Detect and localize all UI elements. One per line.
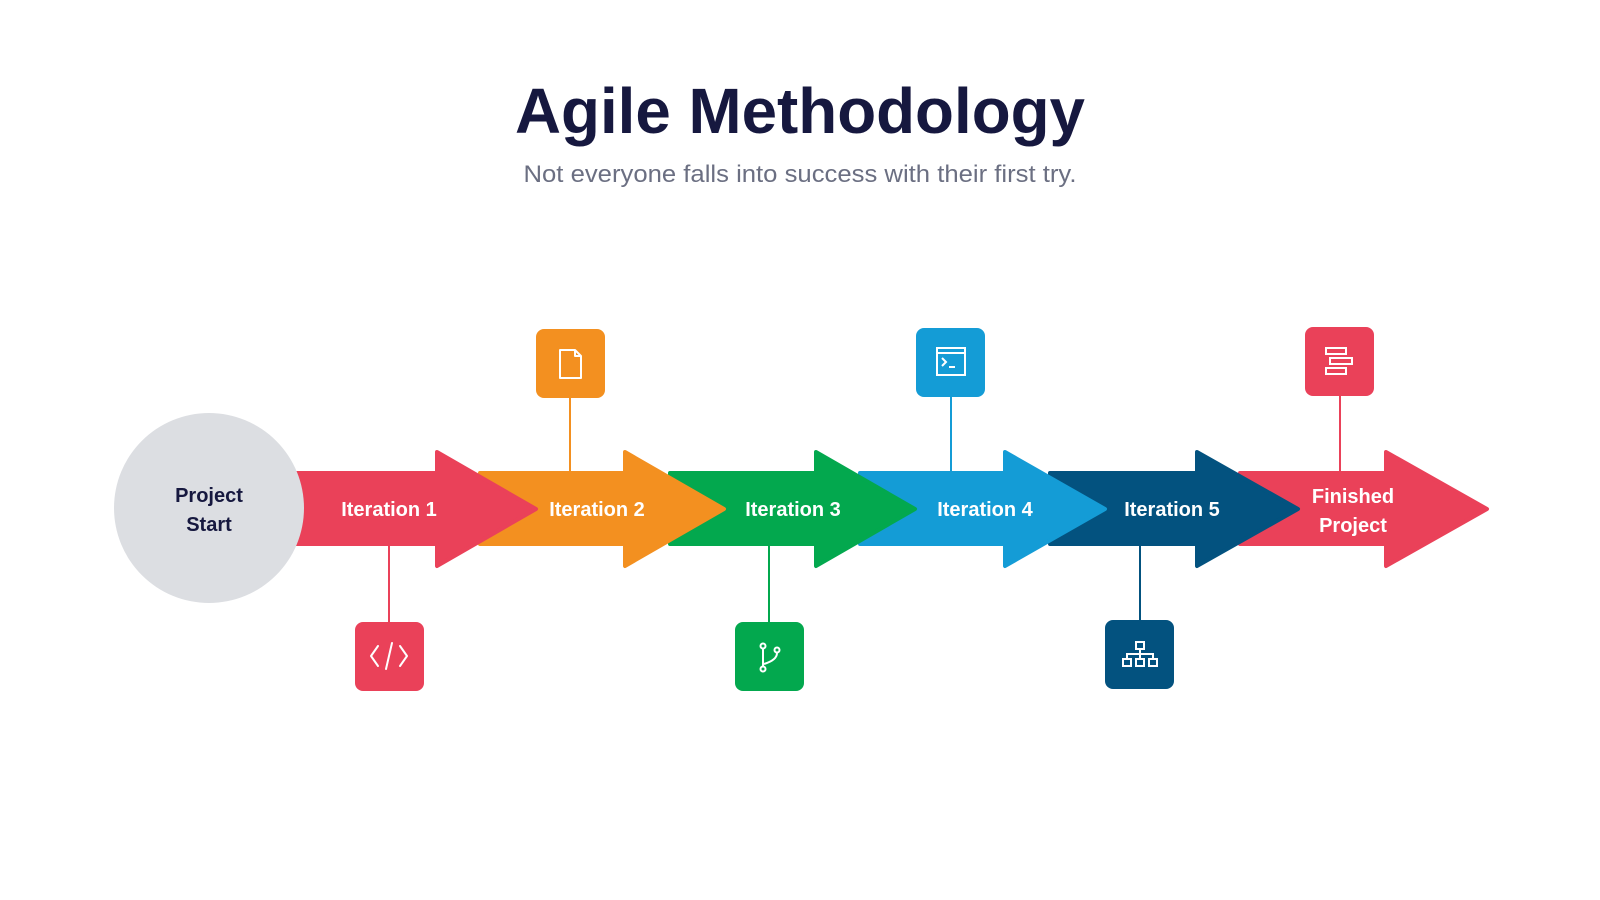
icon: code (iteration 1) xyxy=(355,622,424,691)
arrow: finished project: Project xyxy=(1319,515,1387,537)
arrow: iteration 5 xyxy=(1050,452,1298,566)
project start circle: Project xyxy=(175,485,243,507)
project start circle: Start xyxy=(186,514,232,536)
arrow: iteration 2: Iteration 2 xyxy=(549,499,645,521)
arrow: iteration 1: Iteration 1 xyxy=(341,499,437,521)
arrow: iteration 4: Iteration 4 xyxy=(937,499,1034,521)
arrow: finished project xyxy=(1240,452,1487,566)
arrow: iteration 4 xyxy=(860,452,1105,566)
icon: branch (iteration 3) xyxy=(735,622,804,691)
arrow: iteration 5: Iteration 5 xyxy=(1124,499,1220,521)
arrow: iteration 2 xyxy=(480,452,724,566)
arrow: iteration 3 xyxy=(670,452,915,566)
project start circle xyxy=(114,413,304,603)
subtitle: Not everyone falls into success with their first try. xyxy=(524,161,1076,188)
icon: hierarchy (iteration 5) xyxy=(1105,620,1174,689)
icon: terminal (iteration 4) xyxy=(916,328,985,397)
icon: document (iteration 2) xyxy=(536,329,605,398)
arrow: iteration 3: Iteration 3 xyxy=(745,499,841,521)
arrow: finished project: Finished xyxy=(1312,486,1394,508)
icon: gantt bars (finished project) xyxy=(1305,327,1374,396)
connector lines xyxy=(389,396,1340,622)
title: Agile Methodology xyxy=(515,75,1085,147)
arrow: iteration 1 xyxy=(290,452,536,566)
